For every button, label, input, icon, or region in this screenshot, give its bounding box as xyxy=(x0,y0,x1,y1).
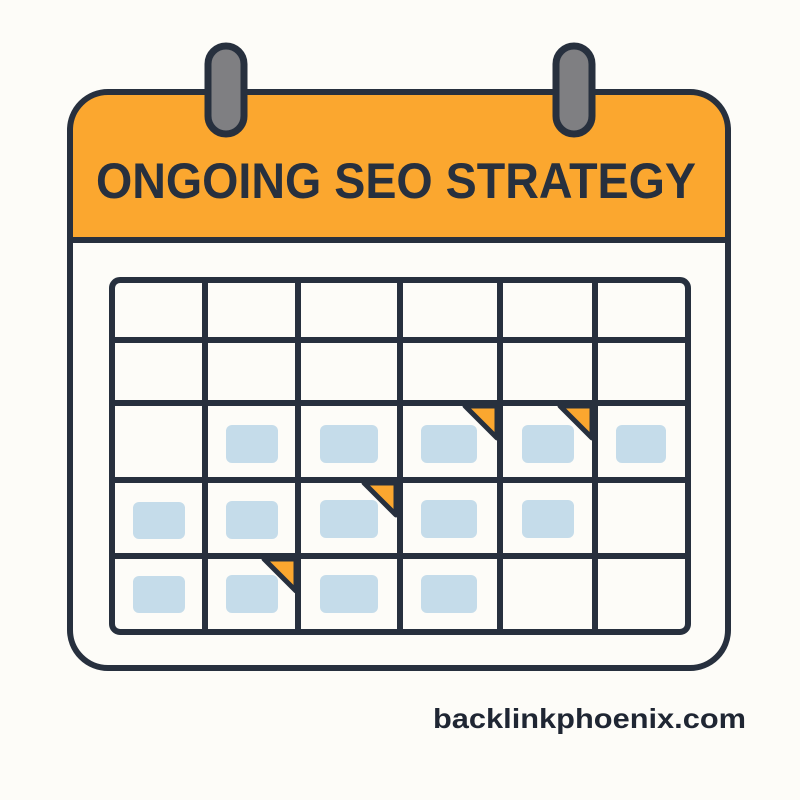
calendar grid xyxy=(112,280,688,632)
blue task blocks xyxy=(133,425,666,613)
calendar body xyxy=(70,92,728,668)
footer url: backlinkphoenix.com xyxy=(433,703,746,734)
orange corner folds xyxy=(264,406,592,591)
ring: right xyxy=(556,46,592,134)
ring: left xyxy=(208,46,244,134)
title: ONGOING SEO STRATEGY xyxy=(96,153,696,209)
